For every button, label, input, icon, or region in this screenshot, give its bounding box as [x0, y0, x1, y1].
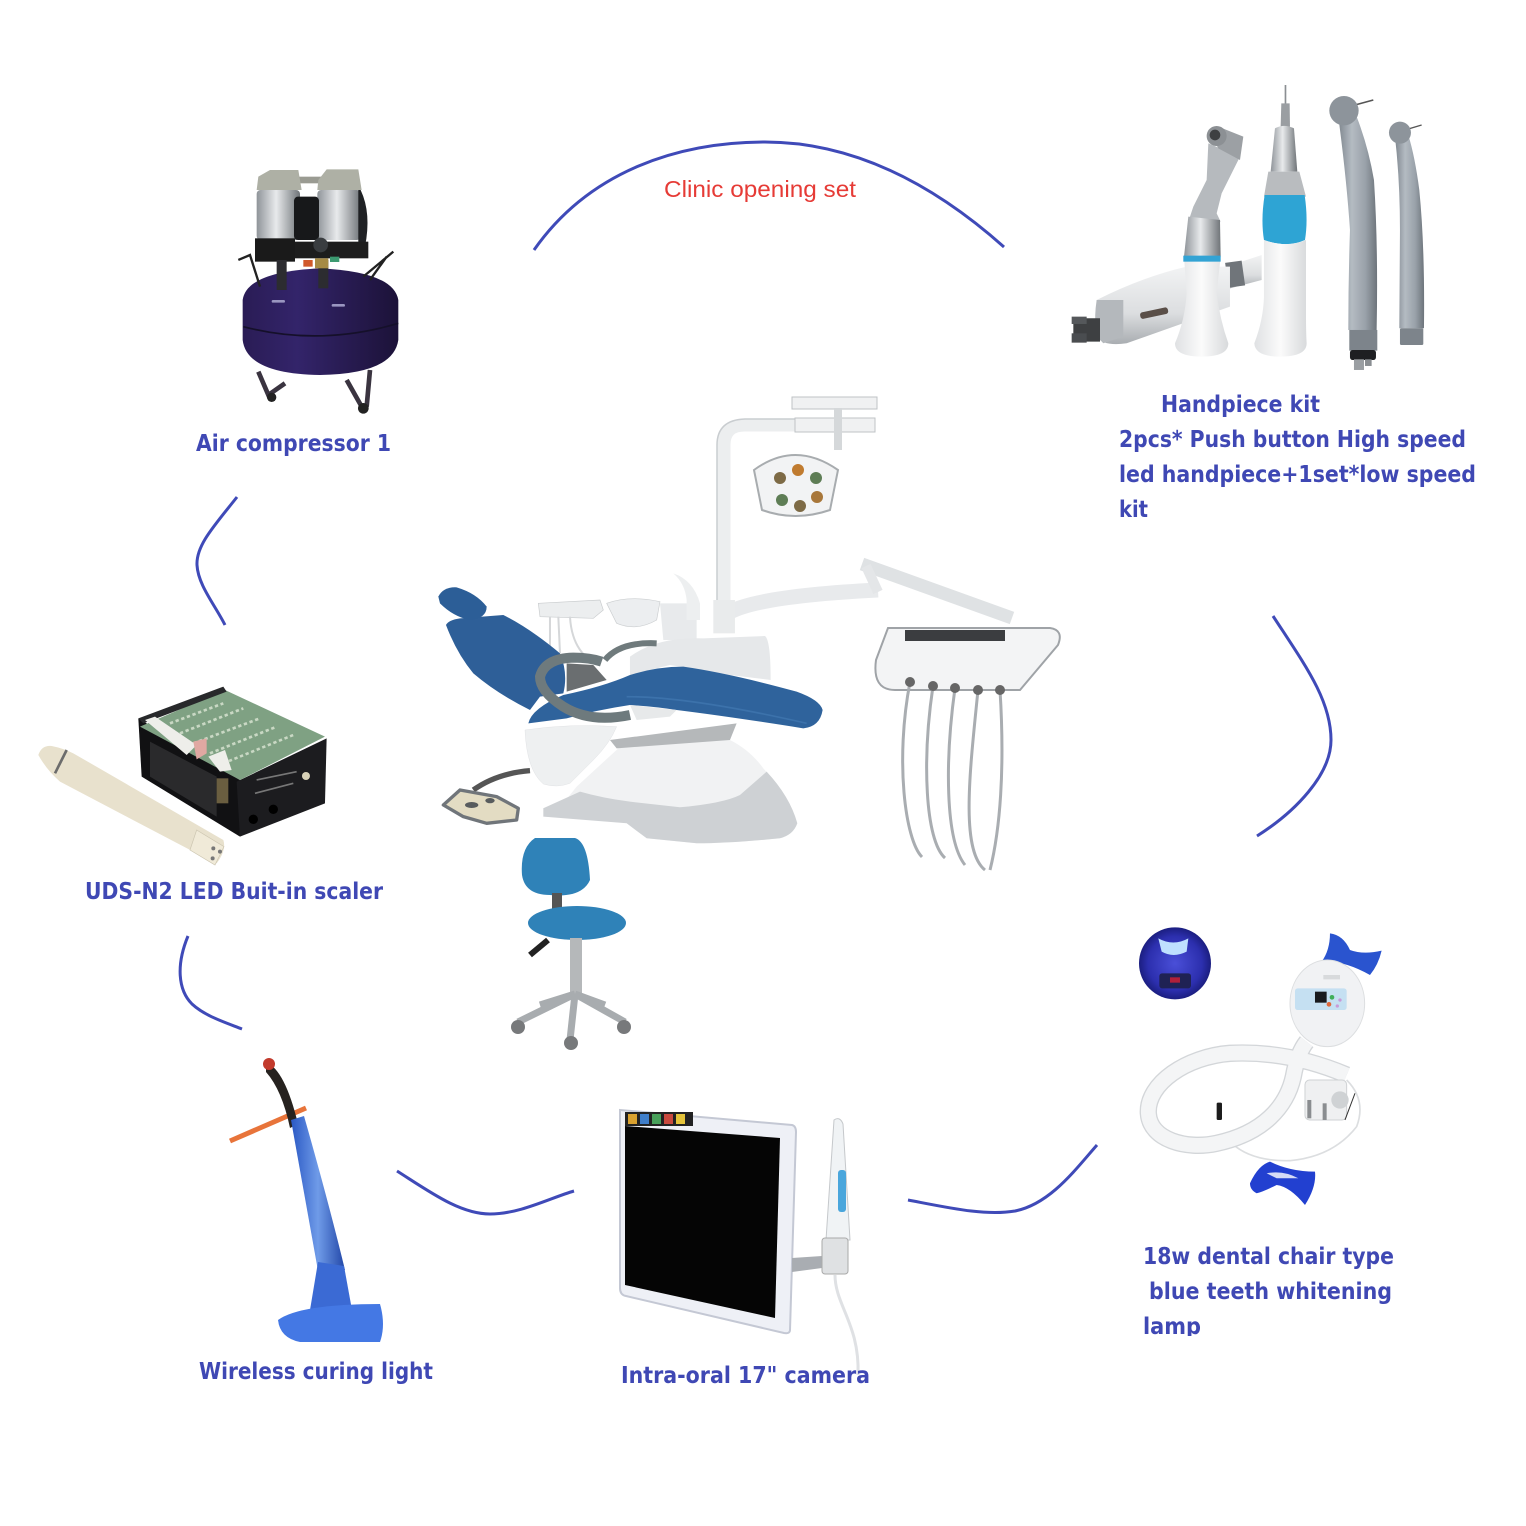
cable	[1230, 1080, 1360, 1161]
label: UDS-N2 scaler: UDS-N2 LED Buit-in scaler	[85, 879, 384, 905]
arrow: lower left curve	[180, 936, 242, 1029]
arrow: right arc	[1257, 616, 1331, 836]
icon: wireless curing light	[230, 1058, 383, 1342]
neck and hose	[1148, 1042, 1347, 1145]
motor	[1227, 255, 1262, 288]
label: whitening lamp: lamp	[1143, 1314, 1201, 1340]
label: Intra-oral camera: Intra-oral 17" camera	[621, 1363, 870, 1389]
icon: ultrasonic scaler	[38, 687, 327, 865]
headrest	[438, 587, 487, 620]
contra-angle	[1188, 143, 1240, 222]
large high speed handpiece	[1355, 100, 1373, 105]
seat	[528, 667, 823, 728]
label: whitening lamp: blue teeth whitening	[1149, 1279, 1392, 1305]
armrest	[540, 658, 630, 718]
arrow: upper left curve	[197, 497, 237, 625]
backrest	[446, 615, 565, 710]
label: whitening lamp: 18w dental chair type	[1143, 1244, 1394, 1270]
icon: air compressor	[238, 169, 398, 414]
label: Handpiece kit: led handpiece+1set*low speed	[1119, 462, 1476, 488]
label: Handpiece kit: Handpiece kit	[1161, 392, 1320, 418]
arrow: lower right curve	[908, 1145, 1097, 1213]
label: Air compressor: Air compressor 1	[196, 431, 391, 457]
inset glow photo	[1139, 927, 1211, 999]
mouth tray	[1250, 1162, 1315, 1205]
icon: dental lamp and delivery arm	[717, 397, 1060, 870]
circuit board	[140, 690, 325, 780]
spittoon	[607, 599, 660, 627]
icon: handpiece kit	[1072, 85, 1424, 370]
head	[1322, 933, 1382, 975]
unit open side	[138, 718, 240, 837]
arrow: lower middle curve	[397, 1171, 574, 1214]
handpiece	[38, 746, 224, 863]
heading: Clinic opening set: Clinic opening set	[664, 176, 856, 202]
icon: dental chair	[438, 573, 823, 843]
label: Handpiece kit: 2pcs* Push button High speed	[1119, 427, 1466, 453]
plug	[1305, 1080, 1347, 1120]
label: whitening lamp	[1143, 1244, 1394, 1340]
label: Wireless curing light: Wireless curing light	[199, 1359, 433, 1385]
foot pedal	[473, 771, 530, 790]
label: Handpiece kit	[1119, 392, 1476, 523]
body housing	[630, 636, 771, 680]
small high speed handpiece	[1405, 125, 1422, 130]
lift and base	[563, 740, 797, 843]
icon: dentist stool	[511, 838, 631, 1050]
icon: intra-oral camera monitor	[620, 1110, 858, 1375]
tray behind chair	[538, 600, 603, 618]
straight handpiece	[1285, 85, 1286, 123]
label: Handpiece kit: kit	[1119, 497, 1148, 523]
unit front face	[237, 738, 327, 837]
icon: teeth whitening lamp	[1139, 927, 1382, 1205]
arrow: top arc	[534, 142, 1004, 250]
